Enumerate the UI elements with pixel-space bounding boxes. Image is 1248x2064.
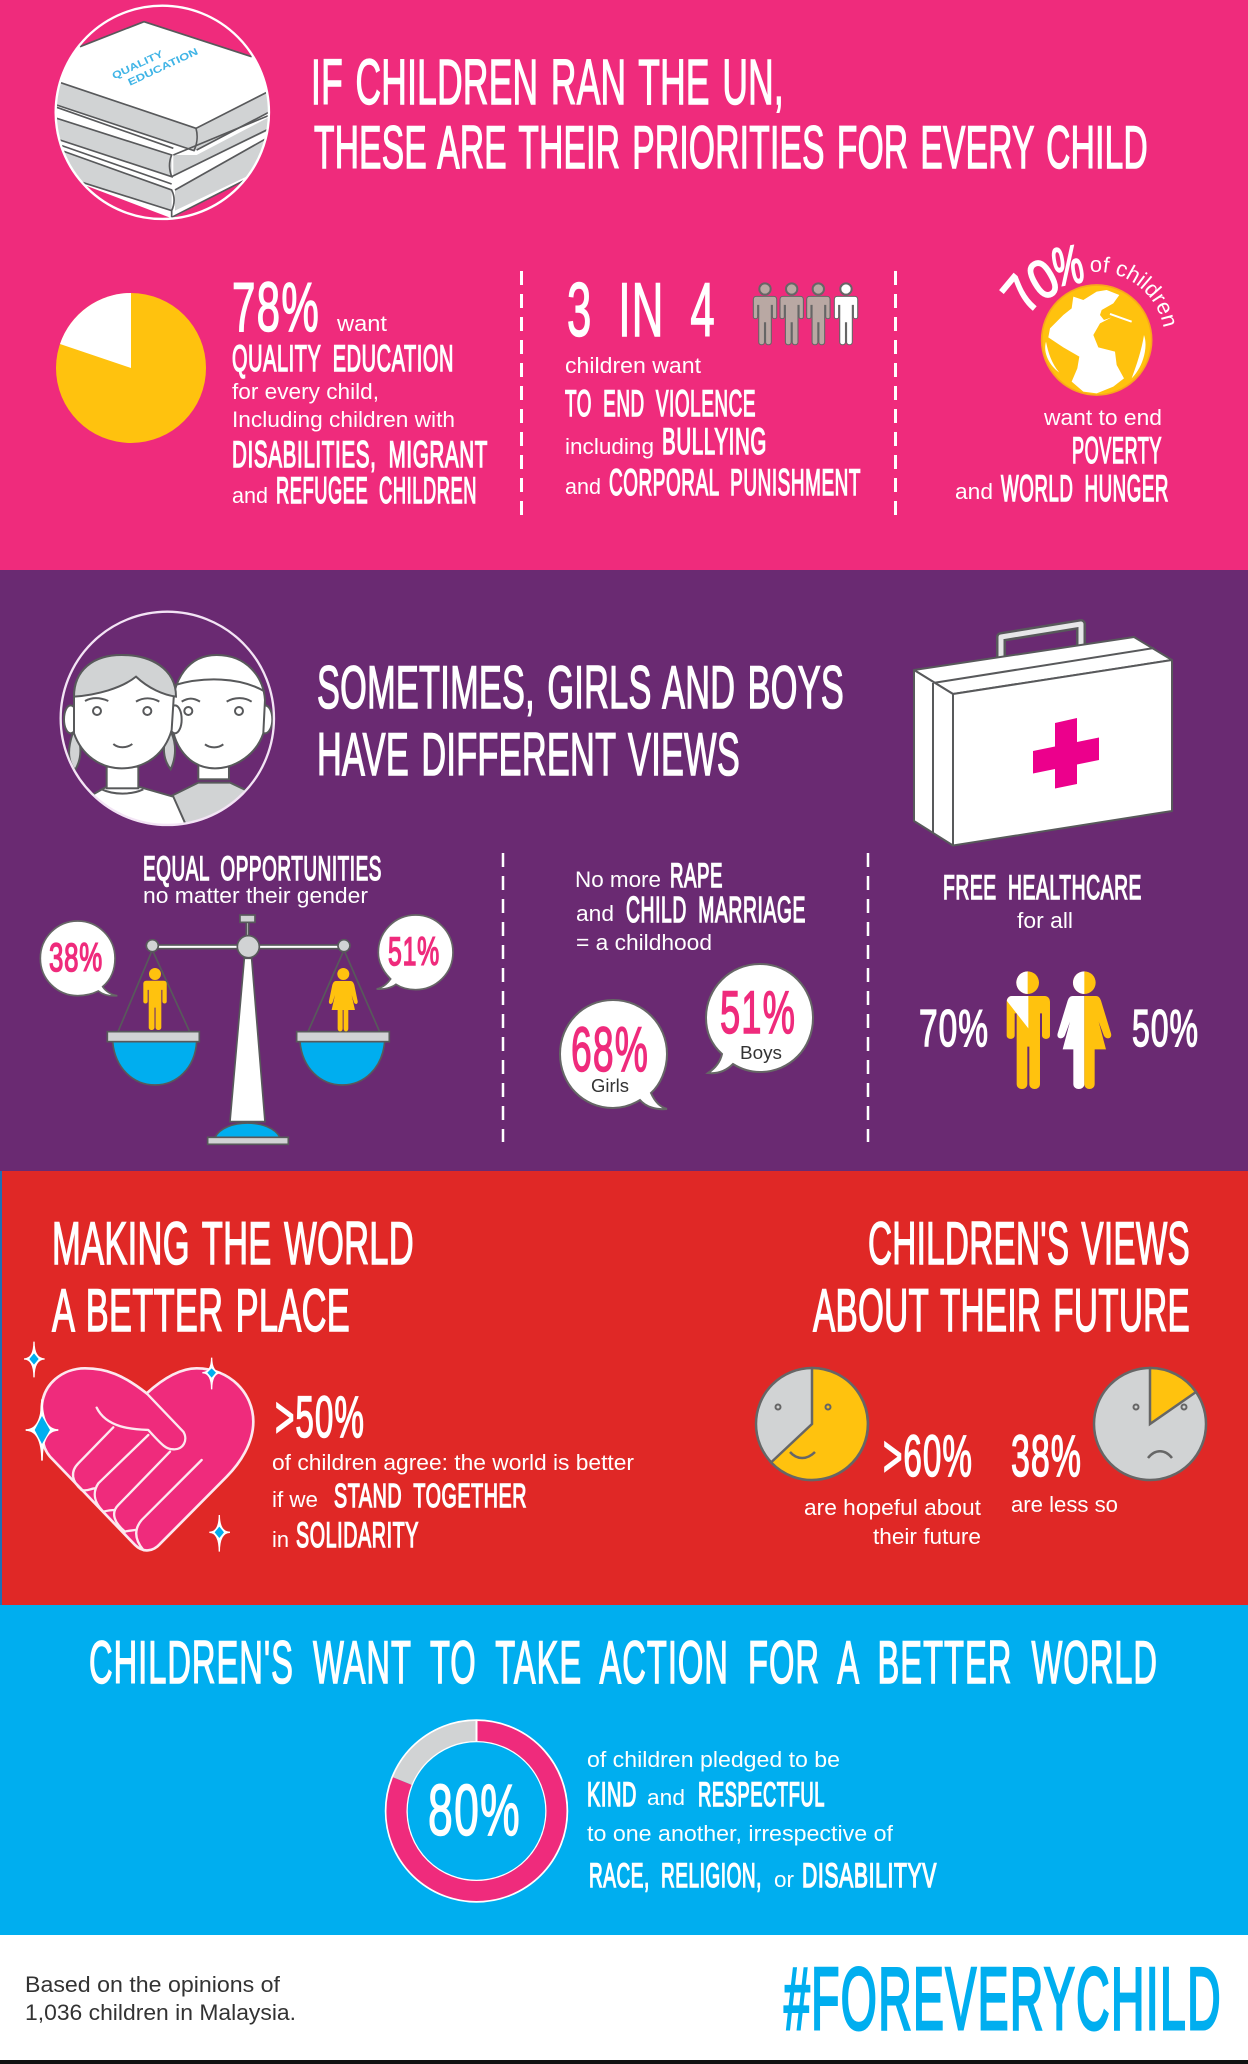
text block: stand together: STAND TOGETHER: [334, 1477, 527, 1514]
text block: quality education: REFUGEE CHILDREN: [276, 470, 477, 511]
text block: no more rape: = a childhood: [576, 930, 712, 955]
girl: [64, 655, 187, 840]
bubble left: [40, 921, 117, 996]
bubble: boys 51 percent: Boys: [740, 1043, 782, 1063]
icon: handshake heart with sparkles: [24, 1342, 253, 1552]
icon: hopeful face pie: [756, 1368, 868, 1480]
text block: stand together: SOLIDARITY: [296, 1516, 419, 1555]
bubble labels: 38 and 51 percent: [49, 930, 440, 980]
icon: man and woman figures: [1007, 971, 1111, 1089]
title: [311, 46, 1148, 181]
bubble: boys 51 percent: 51%: [720, 979, 796, 1046]
stat: less hopeful: are less so: [1011, 1492, 1118, 1517]
text block: end violence: children want: [565, 353, 701, 378]
icon: sad face pie: [1094, 1368, 1206, 1480]
icon: globe: [1042, 285, 1152, 395]
panel: footer: [0, 1935, 1248, 2064]
bubble: boys 51 percent: [706, 964, 813, 1073]
source note: Based on the opinions of: [25, 1972, 281, 1997]
source note: 1,036 children in Malaysia.: [25, 2000, 296, 2025]
text block: stand together: in: [272, 1527, 289, 1552]
boy: [170, 655, 272, 833]
title: IF CHILDREN RAN THE UN,: [311, 46, 784, 118]
curved label: 70 percent of children: %: [1048, 232, 1089, 298]
stat: girls 50 percent: 50%: [1132, 1000, 1199, 1058]
stat: hopeful: their future: [873, 1524, 981, 1549]
curved label: 70 percent of children: 7: [990, 264, 1054, 323]
icon: stack of books: [47, 6, 280, 219]
stat: less hopeful: [1011, 1424, 1118, 1517]
heading: equal opportunities: EQUAL OPPORTUNITIES: [143, 850, 382, 888]
bubble labels: 38 and 51 percent: 51%: [388, 930, 440, 974]
text block: no more rape: and: [576, 901, 614, 926]
panel: purple gender views section: [0, 570, 1248, 1171]
text block: end poverty: and: [955, 479, 993, 504]
text block: free healthcare: for all: [1017, 908, 1073, 933]
curved label: 70 percent of children: [990, 232, 1174, 327]
text block: free healthcare: [943, 869, 1142, 933]
book cover text: [111, 35, 200, 94]
text block: quality education: want: [336, 311, 387, 336]
panel: red future section: [0, 1171, 1248, 1605]
text block: end violence: and: [565, 474, 601, 499]
source note: [25, 1972, 296, 2025]
text block: quality education: DISABILITIES, MIGRANT: [232, 434, 488, 475]
bubble: girls 68 percent: 68%: [571, 1015, 649, 1085]
text block: quality education: QUALITY EDUCATION: [232, 338, 454, 379]
text block: no more rape: No more: [575, 867, 661, 892]
bubble right: [377, 915, 453, 990]
text block: end violence: BULLYING: [662, 421, 767, 462]
small woman figure: [329, 968, 358, 1031]
donut chart: 80 percent: [386, 1720, 567, 1902]
stat: less hopeful: 38%: [1011, 1424, 1082, 1489]
heading: making the world a better place: A BETTER PLACE: [52, 1277, 350, 1344]
text block: pledge: DISABILITYV: [802, 1857, 937, 1895]
heading: equal opportunities: [143, 850, 382, 908]
stat: hopeful: are hopeful about: [804, 1495, 981, 1520]
text block: stand together: [272, 1385, 634, 1555]
panel: pink priorities section: [0, 0, 1248, 570]
text block: end violence: [565, 268, 861, 503]
text block: pledge: of children pledged to be: [587, 1747, 840, 1772]
stat: boys 70 percent: 70%: [919, 1000, 989, 1058]
bubble labels: 38 and 51 percent: 38%: [49, 936, 103, 980]
heading: [317, 654, 844, 788]
text block: quality education: for every child,: [232, 379, 379, 404]
heading: making the world a better place: MAKING THE WORLD: [52, 1210, 414, 1277]
book cover text: QUALITY: [111, 49, 165, 82]
text block: end violence: 3 IN 4: [567, 268, 716, 353]
text block: no more rape: RAPE: [670, 857, 723, 895]
donut chart: 80 percent: 80%: [428, 1771, 521, 1851]
text block: end poverty: want to end: [1043, 405, 1162, 430]
text block: end violence: including: [565, 434, 654, 459]
curved label: 70 percent of children: 0: [1017, 246, 1070, 312]
text block: quality education: and: [232, 483, 268, 508]
heading: SOMETIMES, GIRLS AND BOYS: [317, 654, 844, 721]
text block: pledge: and: [647, 1785, 685, 1810]
text block: pledge: [587, 1747, 937, 1895]
text block: pledge: or: [774, 1867, 794, 1892]
text block: end violence: TO END VIOLENCE: [565, 383, 756, 424]
text block: stand together: of children agree: the world is better: [272, 1450, 634, 1475]
bubble: girls 68 percent: Girls: [591, 1076, 629, 1096]
pie chart: 78 percent: [56, 293, 206, 443]
panel: blue take action section: [0, 1605, 1248, 1935]
heading: equal opportunities: no matter their gender: [143, 883, 368, 908]
icon: four people, three highlighted: [753, 283, 858, 345]
text block: stand together: >50%: [275, 1385, 365, 1450]
heading: children's views about their future: [813, 1210, 1190, 1344]
small man figure: [143, 968, 167, 1030]
stat: hopeful: >60%: [883, 1424, 973, 1489]
text block: pledge: to one another, irrespective of: [587, 1821, 894, 1846]
icon: girl and boy portrait: [61, 612, 274, 840]
stat: hopeful: [804, 1424, 981, 1549]
curved label: 70 percent of children: of children: [1090, 256, 1174, 327]
text block: no more rape: CHILD MARRIAGE: [626, 889, 806, 930]
text block: end violence: CORPORAL PUNISHMENT: [609, 462, 861, 503]
icon: balance scale with bubbles: [40, 915, 453, 1144]
text block: pledge: KIND: [587, 1776, 637, 1814]
icon: first aid kit: [914, 624, 1172, 846]
bubble: girls 68 percent: [560, 1000, 667, 1109]
text block: quality education: [232, 268, 488, 511]
text block: quality education: Including children with: [232, 407, 455, 432]
text block: end poverty: [955, 405, 1169, 509]
text block: stand together: if we: [272, 1487, 318, 1512]
text block: quality education: 78%: [232, 268, 320, 346]
book cover text: EDUCATION: [127, 47, 200, 89]
text block: pledge: RACE, RELIGION,: [589, 1857, 762, 1895]
sparkles: [24, 1342, 230, 1552]
heading: HAVE DIFFERENT VIEWS: [317, 721, 740, 788]
text block: no more rape: [575, 857, 806, 955]
text block: pledge: RESPECTFUL: [698, 1776, 825, 1814]
heading: making the world a better place: [52, 1210, 414, 1344]
